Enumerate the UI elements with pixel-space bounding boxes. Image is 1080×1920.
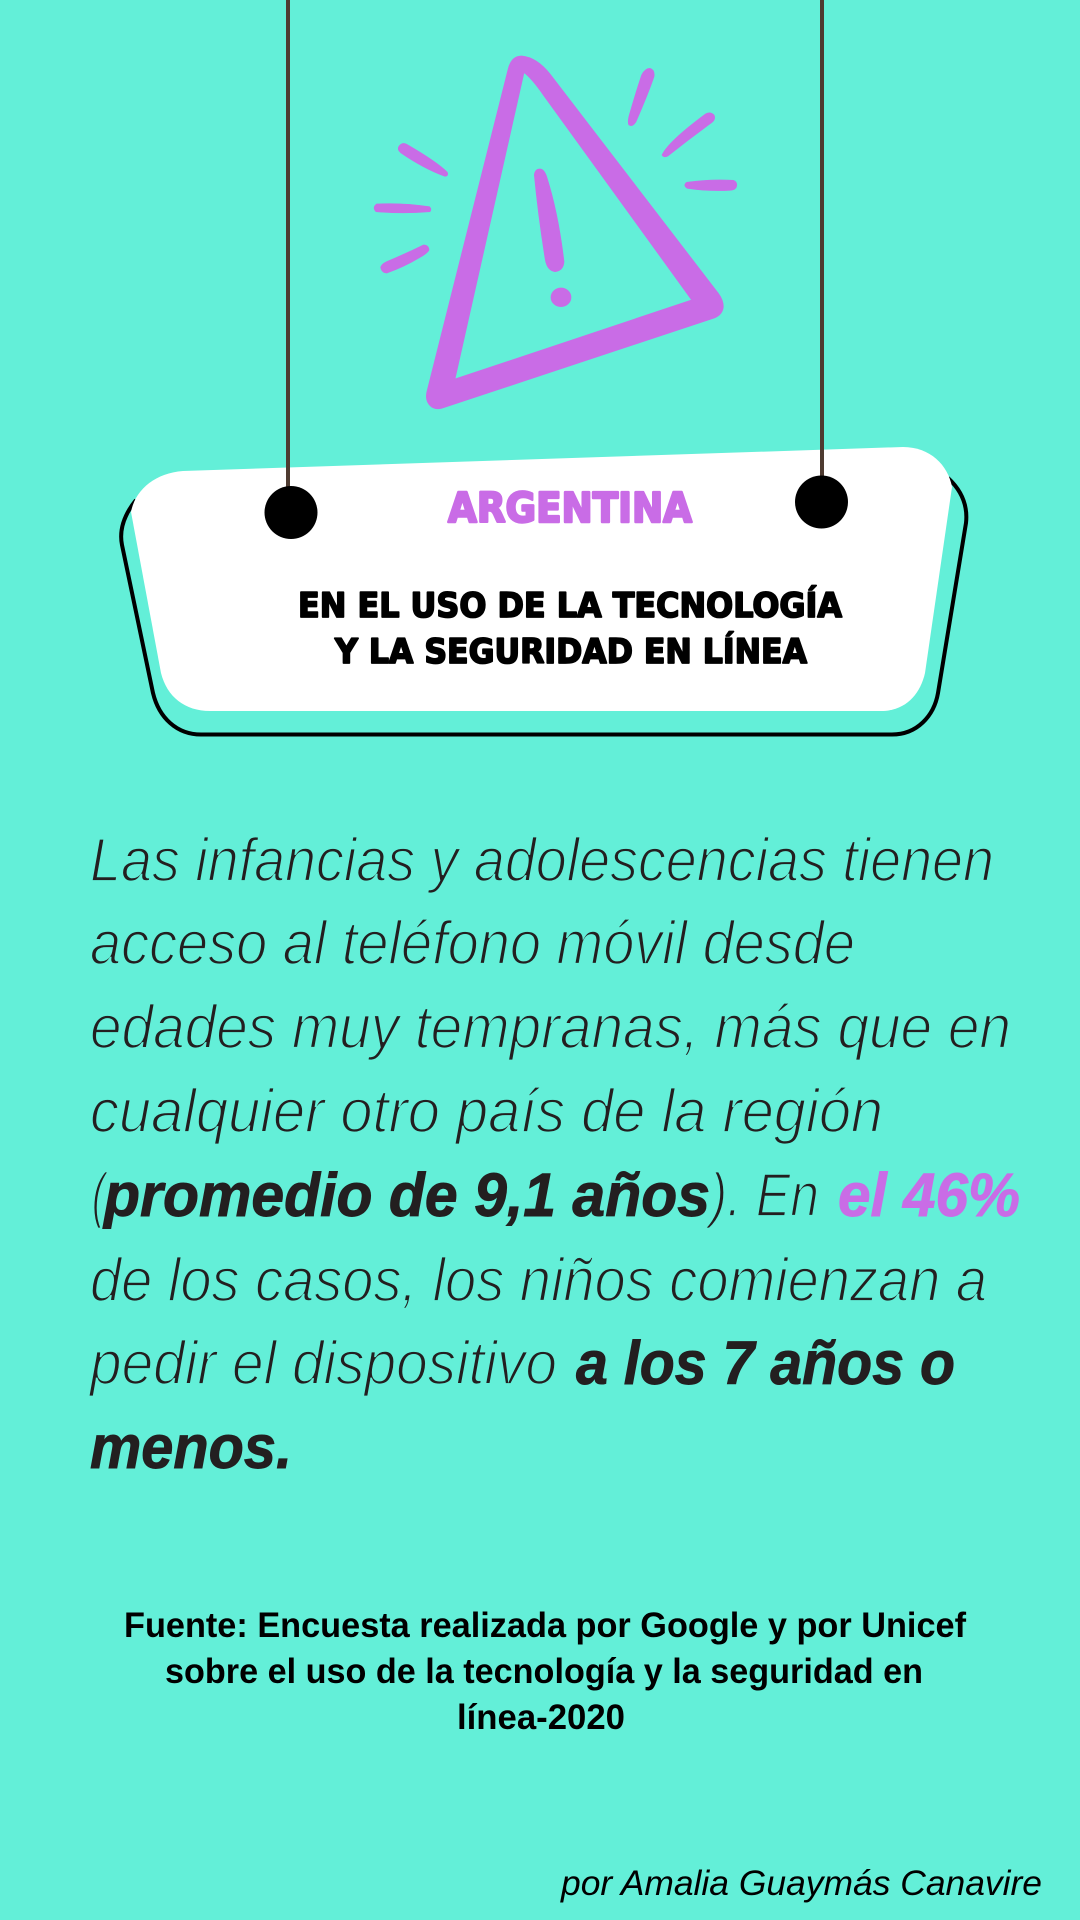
right hanging cord — [820, 0, 824, 480]
text block: source: sobre el uso de la tecnología y la seguridad en — [165, 1652, 923, 1691]
text block: main paragraph: menos. — [90, 1413, 292, 1481]
text block: main paragraph: ). En — [705, 1161, 819, 1229]
text block: main paragraph: ( — [92, 1161, 109, 1229]
text block: main paragraph: de los casos, los niños comienzan a — [90, 1246, 987, 1314]
triangle outline — [426, 56, 723, 409]
text block: main paragraph: pedir el dispositivo — [88, 1329, 557, 1397]
text block: source — [124, 1606, 966, 1737]
alert rays — [374, 68, 737, 273]
sign offset outline — [121, 478, 966, 734]
text block: main paragraph: cualquier otro país de la región — [90, 1077, 883, 1145]
right pin — [795, 476, 848, 528]
highlighted statistic: el 46% — [838, 1161, 1020, 1229]
text block: main paragraph: a los 7 años o — [576, 1329, 955, 1397]
left hanging cord — [286, 0, 290, 490]
heading: subtitle — [298, 585, 843, 672]
heading: country: ARGENTINA — [448, 484, 692, 532]
heading: subtitle: Y LA SEGURIDAD EN LÍNEA — [334, 631, 808, 672]
text block: main paragraph: Las infancias y adolescencias tienen — [90, 826, 994, 894]
text block: main paragraph: edades muy tempranas, más que en — [90, 993, 1011, 1061]
heading: subtitle: EN EL USO DE LA TECNOLOGÍA — [298, 585, 843, 626]
text block: main paragraph: acceso al teléfono móvil desde — [90, 909, 855, 977]
icon: warning triangle with exclamation mark — [374, 56, 737, 409]
exclamation mark — [534, 169, 571, 307]
text block: author credit: por Amalia Guaymás Canavire — [560, 1864, 1042, 1903]
text block: main paragraph — [88, 826, 1020, 1481]
text block: source: línea-2020 — [457, 1698, 625, 1737]
text block: source: Fuente: Encuesta realizada por Google y por Unicef — [124, 1606, 966, 1645]
sign white board — [131, 447, 952, 711]
left pin — [264, 486, 318, 539]
panel: hanging sign — [121, 0, 966, 734]
text block: main paragraph: promedio de 9,1 años — [102, 1161, 710, 1229]
